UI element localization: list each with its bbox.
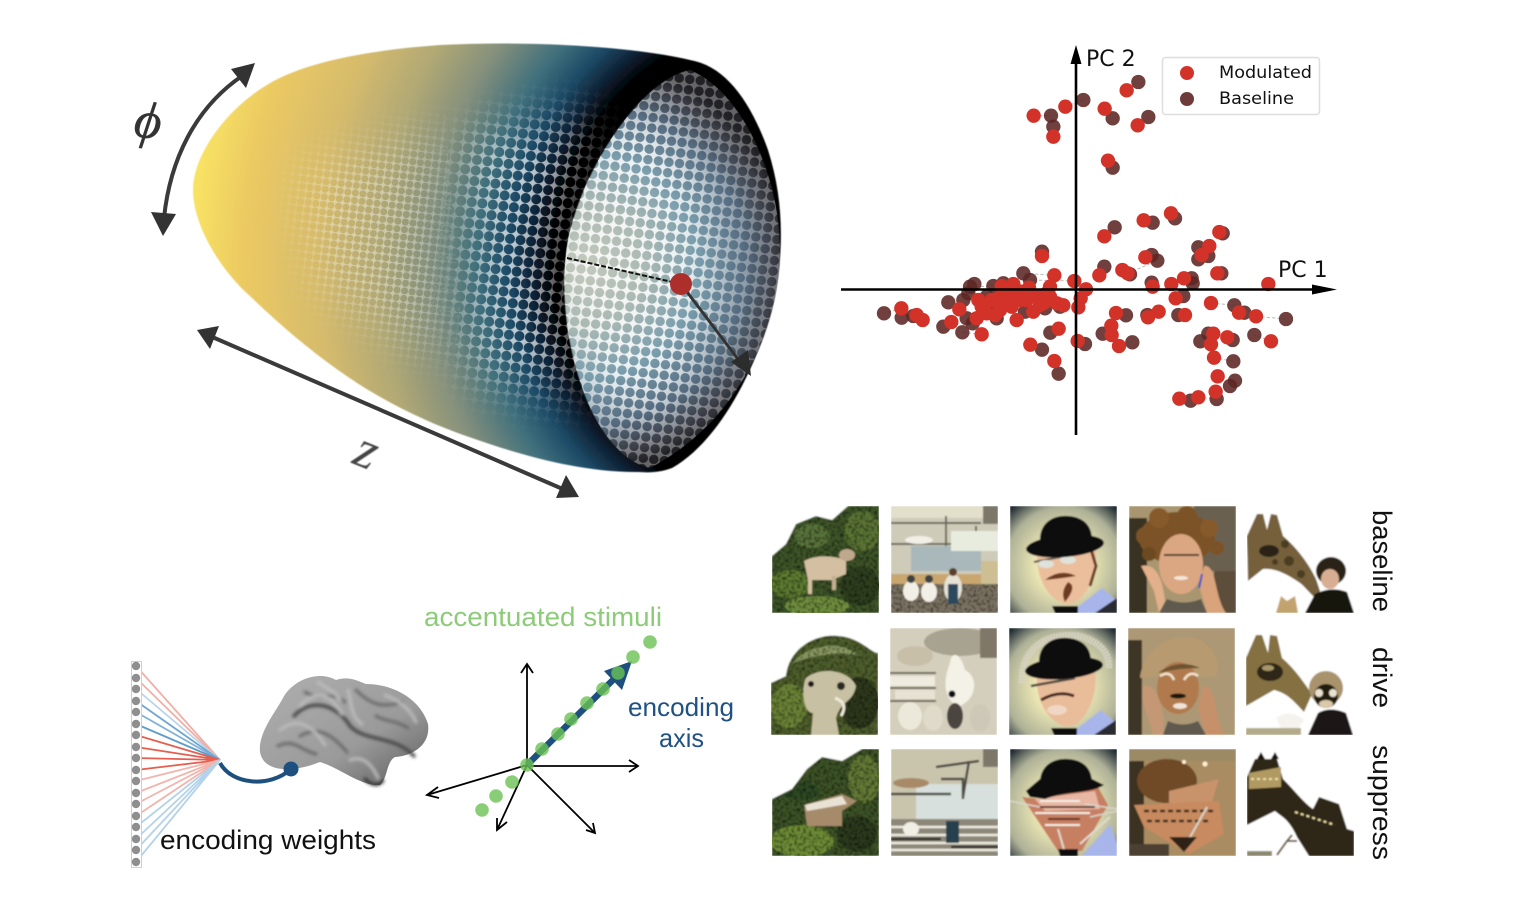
label: phi: ϕ (131, 91, 166, 151)
image: kitchen suppress (891, 749, 998, 856)
panel: 3D parabolic surface (193, 43, 800, 490)
label: encoding axis: encoding (628, 692, 734, 722)
open end of surface (564, 70, 780, 468)
arrow: z (197, 326, 579, 498)
image: kitchen drive (890, 628, 997, 735)
image: cow baseline (770, 506, 880, 616)
image: curly man suppress (1129, 749, 1236, 856)
image: cow drive (771, 628, 879, 735)
label: accentuated stimuli: accentuated stimuli (424, 602, 662, 632)
red point (670, 273, 692, 295)
label: encoding axis: axis (659, 723, 704, 753)
legend (1162, 58, 1320, 114)
image: giraffe drive (1246, 628, 1353, 735)
panel: encoding axis diagram (424, 602, 734, 833)
coordinate axes (427, 664, 638, 833)
y axis (1070, 45, 1082, 435)
label: encoding weights: encoding weights (160, 825, 376, 855)
image: kitchen baseline (891, 506, 998, 613)
label: encoding axis (628, 692, 734, 753)
stimuli dots (475, 635, 657, 817)
panel: PCA scatter plot (841, 45, 1337, 435)
x axis (841, 284, 1337, 294)
image: man with hat drive (1009, 628, 1116, 735)
image: giraffe suppress (1247, 749, 1354, 856)
modulated points (894, 83, 1278, 406)
dashed radius line (567, 258, 681, 284)
input unit column (132, 662, 142, 868)
pair connectors (884, 100, 1286, 399)
baseline points (877, 75, 1293, 408)
legend: Baseline (1219, 89, 1294, 108)
dot lattice on surface (284, 88, 616, 422)
icon: brain (260, 676, 428, 785)
radius arrow (681, 284, 751, 376)
label: z: z (345, 418, 388, 482)
image: curly man drive (1128, 628, 1235, 735)
panel: image grid (770, 506, 1354, 857)
connector to brain (220, 762, 298, 782)
label: PC 1: PC 1 (1278, 258, 1328, 283)
scatter points (877, 75, 1293, 408)
surface body (193, 43, 781, 472)
arrow: phi (151, 63, 255, 236)
encoding axis arrow (527, 661, 632, 765)
panel: encoding weights (132, 662, 428, 868)
label: PC 2: PC 2 (1086, 47, 1136, 72)
label: suppress: suppress (1367, 745, 1397, 860)
label: drive: drive (1367, 647, 1397, 708)
weight lines (136, 666, 220, 862)
image: curly man baseline (1129, 506, 1236, 613)
label: baseline: baseline (1367, 510, 1397, 612)
image: cow suppress (770, 749, 880, 857)
image: giraffe baseline (1247, 506, 1354, 613)
legend: Modulated (1219, 63, 1312, 82)
image: man with hat suppress (1010, 749, 1117, 856)
image: man with hat baseline (1010, 506, 1117, 613)
